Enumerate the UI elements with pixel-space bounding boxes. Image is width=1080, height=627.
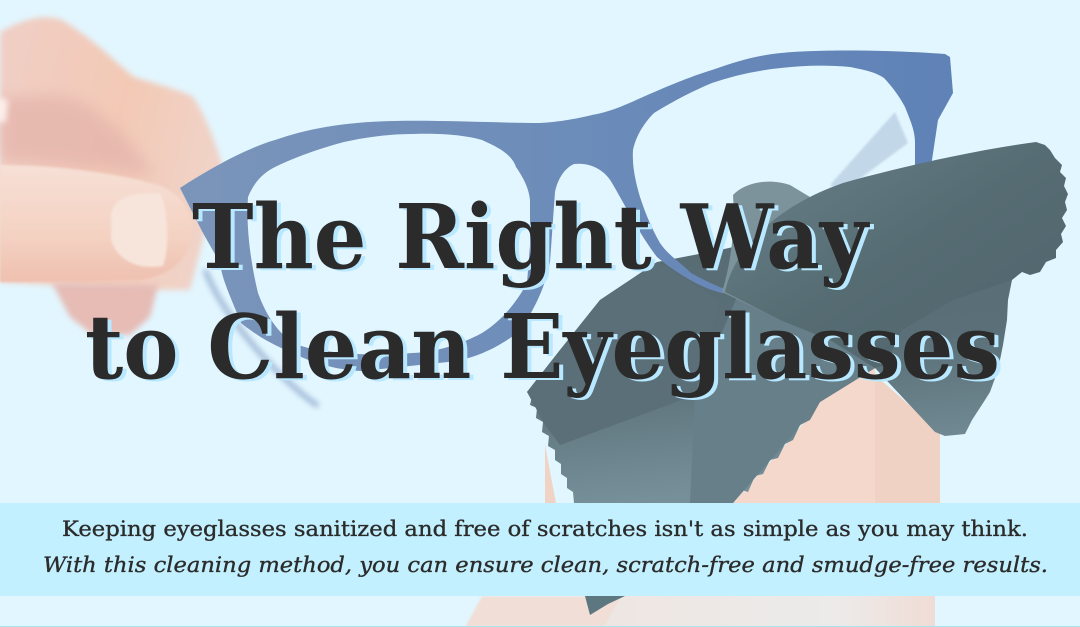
photo: eyeglasses frame — [180, 50, 953, 371]
photo: left hand holding glasses — [0, 17, 222, 335]
title — [85, 184, 1004, 401]
title text: to Clean Eyeglasses — [85, 294, 1000, 399]
photo: right hand fingers — [465, 365, 940, 627]
banner line 2: With this cleaning method, you can ensure clean, scratch-free and smudge-free results. — [43, 553, 1048, 578]
title shadow — [89, 186, 1004, 401]
title text: The Right Way — [192, 184, 870, 289]
banner text — [43, 517, 1048, 578]
photo: blurred temple arm left — [205, 270, 318, 406]
banner — [0, 503, 1080, 596]
photo: microfiber cloth upper fold — [722, 142, 1068, 368]
photo: microfiber cloth lower part — [527, 220, 1012, 503]
photo: dark cloth tip below banner — [585, 596, 625, 615]
photo: temple arm behind right lens — [830, 112, 908, 192]
bottom edge line — [0, 626, 1080, 627]
banner line 1: Keeping eyeglasses sanitized and free of scratches isn't as simple as you may think. — [62, 517, 1028, 542]
title shadow: to Clean Eyeglasses — [89, 296, 1004, 401]
title text — [85, 184, 1000, 399]
title shadow: The Right Way — [196, 186, 874, 291]
